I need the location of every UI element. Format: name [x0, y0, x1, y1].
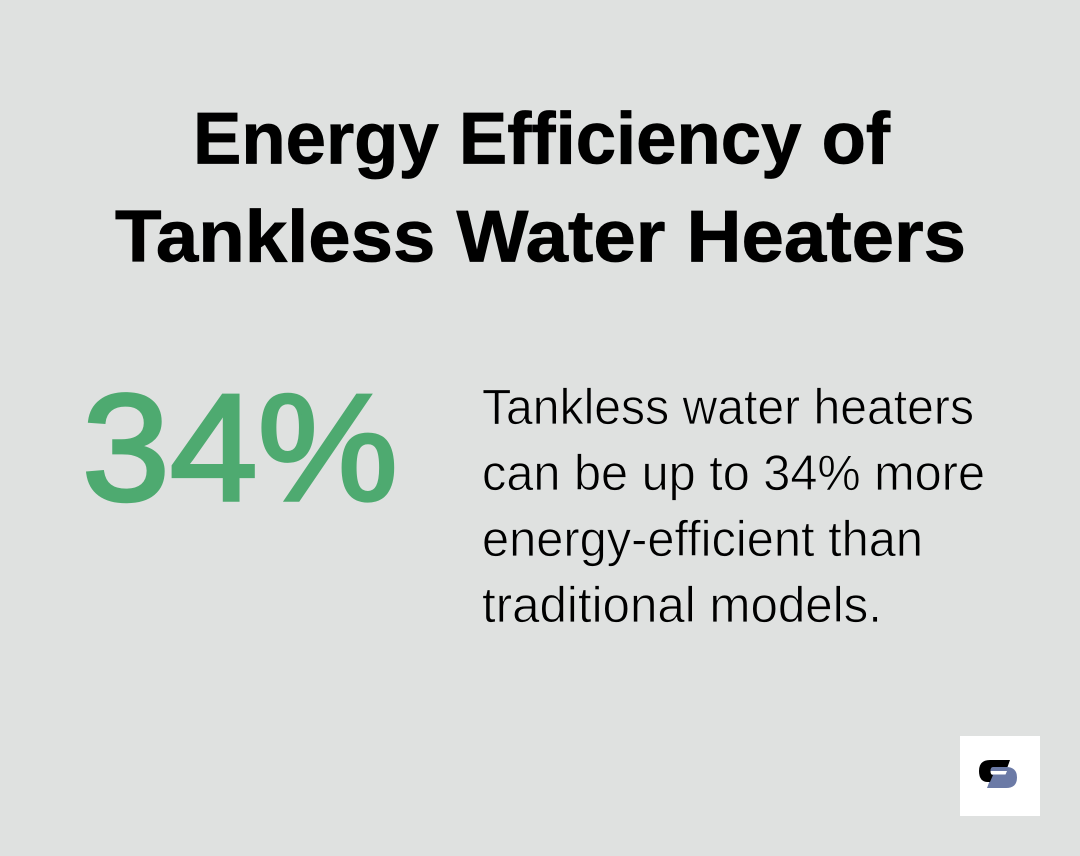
- icon: logo S mark: [979, 760, 1017, 788]
- description text: energy-efficient than: [482, 511, 923, 567]
- description text: can be up to 34% more: [482, 445, 985, 501]
- description text: Tankless water heaters: [482, 379, 974, 435]
- big stat: 34%: 34%: [82, 363, 398, 533]
- description text: traditional models.: [482, 577, 882, 633]
- logo badge: [960, 736, 1040, 816]
- title: [115, 98, 966, 278]
- title: Energy Efficiency of: [193, 98, 891, 180]
- title: Tankless Water Heaters: [115, 196, 966, 278]
- description text: [482, 379, 985, 633]
